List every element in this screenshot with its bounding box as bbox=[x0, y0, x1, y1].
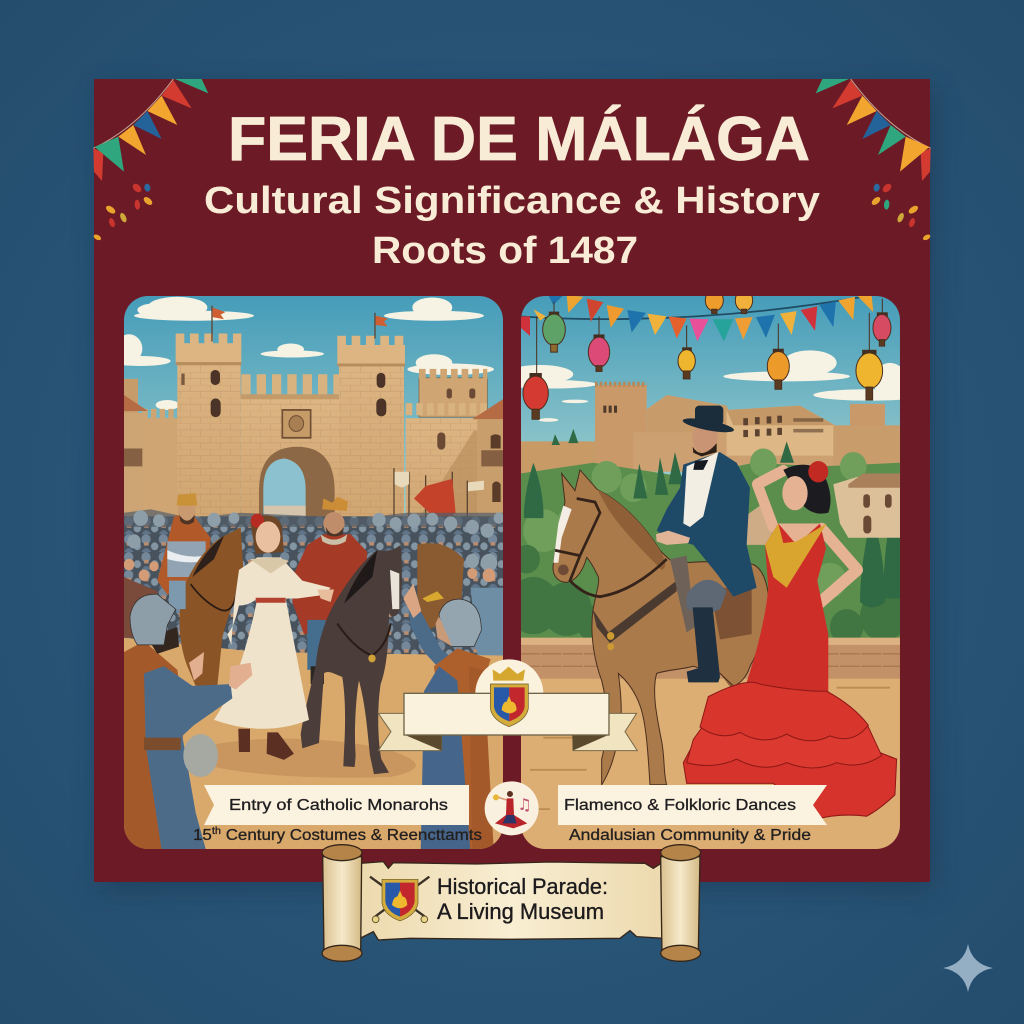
scroll text: Historical Parade: bbox=[437, 874, 608, 899]
kneeling knight left bbox=[124, 594, 252, 855]
terrace wall bbox=[520, 638, 900, 681]
clouds bbox=[503, 350, 927, 422]
caption left bbox=[204, 785, 469, 825]
shield and swords bbox=[370, 877, 429, 923]
ground bbox=[124, 638, 504, 855]
title: FERIA DE MÁLÁGA bbox=[228, 105, 810, 174]
rider in navy coat bbox=[656, 406, 757, 682]
bunting: top left bbox=[93, 79, 208, 181]
dark horse bbox=[301, 545, 402, 774]
ruffles bbox=[683, 682, 897, 820]
ground bbox=[520, 679, 900, 855]
trees and hills bbox=[507, 429, 907, 645]
dancer medallion bbox=[485, 781, 539, 835]
subtitle: roots: Roots of 1487 bbox=[372, 230, 638, 272]
caption right: Flamenco & Folkloric Dances bbox=[564, 797, 796, 814]
gate arch bbox=[259, 409, 335, 516]
queen in white dress bbox=[214, 513, 334, 760]
right roll bbox=[661, 845, 701, 961]
scroll body bbox=[360, 862, 663, 940]
icon: sparkle watermark bbox=[943, 944, 993, 992]
brown horse bbox=[553, 470, 769, 785]
kneeling knight right bbox=[403, 583, 494, 855]
central ribbon with crest bbox=[378, 659, 637, 751]
poster panel bbox=[94, 79, 930, 882]
distant castle bbox=[520, 384, 900, 477]
scroll text bbox=[437, 874, 608, 924]
banners bbox=[393, 468, 484, 516]
music note: ♫ bbox=[517, 795, 532, 814]
shield bbox=[490, 684, 528, 727]
bunting bbox=[520, 295, 873, 341]
sub caption right: Andalusian Community & Pride bbox=[569, 827, 811, 844]
subtitle: Cultural Significance & History bbox=[204, 180, 820, 222]
sub caption left: Century Costumes & Reencttamts bbox=[221, 827, 482, 844]
right side buildings bbox=[746, 474, 900, 545]
confetti: left bbox=[93, 182, 154, 241]
panel: historic entry bbox=[111, 295, 504, 855]
panel: modern fair bbox=[521, 296, 900, 849]
tiny dancer bbox=[493, 791, 527, 828]
caption left: Entry of Catholic Monarohs bbox=[229, 797, 448, 814]
mounted knight and brown horse bbox=[157, 493, 243, 686]
sky bbox=[124, 296, 503, 516]
scroll banner bbox=[322, 845, 701, 961]
scroll text: A Living Museum bbox=[437, 899, 604, 924]
poster shadow bbox=[100, 88, 934, 890]
left tower bbox=[176, 306, 241, 529]
left roll bbox=[322, 845, 362, 961]
sub caption left: 15 bbox=[193, 827, 210, 844]
caption right bbox=[558, 785, 827, 825]
confetti: right bbox=[870, 182, 931, 241]
crowd bbox=[124, 509, 504, 666]
crown bbox=[493, 667, 525, 681]
castle walls bbox=[124, 368, 503, 516]
right tower bbox=[337, 313, 405, 529]
sky bbox=[521, 296, 900, 476]
sub caption left: th bbox=[212, 826, 221, 837]
clouds bbox=[111, 297, 494, 410]
lanterns bbox=[523, 290, 891, 419]
bunting: top right bbox=[816, 79, 931, 181]
flamenco dancer bbox=[683, 461, 897, 820]
king in red bbox=[292, 497, 367, 684]
